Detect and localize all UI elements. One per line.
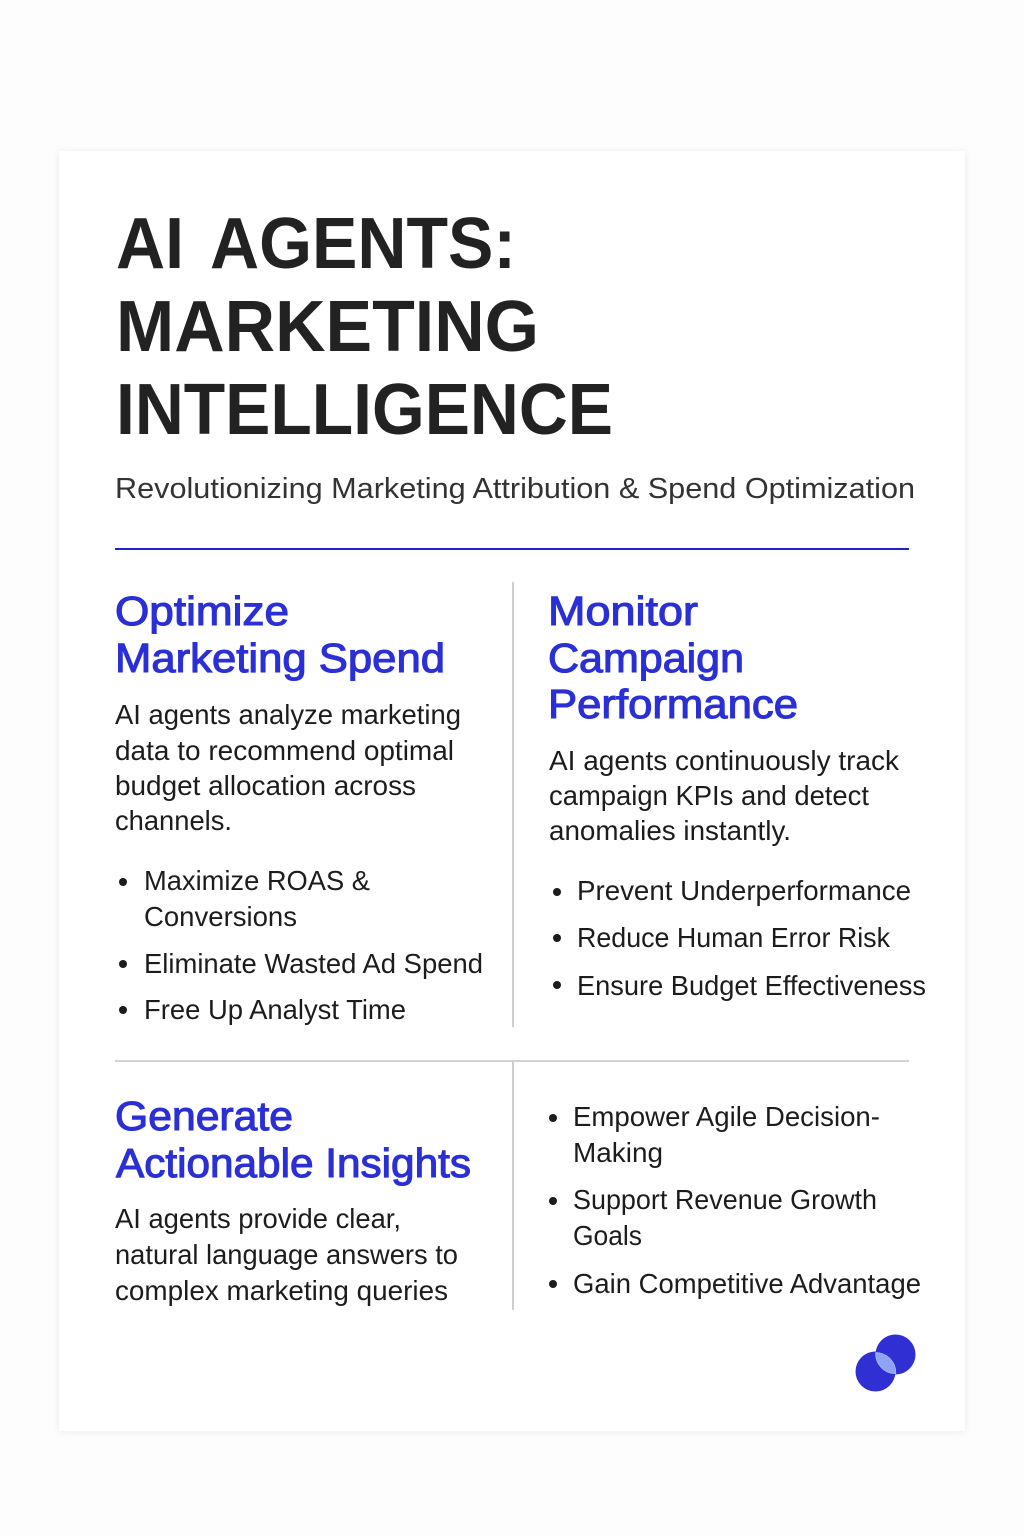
text: monitor description: AI agents continuously track (549, 745, 900, 776)
heading: monitor campaign performance: Campaign (548, 635, 744, 681)
bullet list: monitor benefits: Prevent Underperformance (577, 875, 911, 906)
text: generate description: AI agents provide clear, (115, 1203, 401, 1234)
heading: monitor campaign performance (548, 588, 798, 727)
subtitle: Revolutionizing Marketing Attribution & Spend Optimization (115, 473, 915, 505)
title (116, 204, 613, 450)
panel: generate actionable insights (115, 1093, 471, 1306)
bullet list: insights benefits (549, 1101, 921, 1299)
heading: generate actionable insights: Generate (115, 1093, 293, 1139)
heading: optimize marketing spend: Optimize (115, 588, 289, 634)
heading: optimize marketing spend (115, 588, 445, 681)
panel: optimize marketing spend (115, 588, 483, 1025)
bullet list: insights benefits: Support Revenue Growth (573, 1184, 877, 1215)
panel: monitor campaign performance (548, 588, 926, 1001)
text: optimize description: budget allocation across (115, 770, 416, 801)
text: optimize description (115, 699, 461, 836)
bullet list: optimize benefits: Maximize ROAS & (144, 865, 370, 896)
heading: optimize marketing spend: Marketing Spend (115, 635, 445, 681)
text: optimize description: data to recommend optimal (115, 735, 454, 766)
text: monitor description: campaign KPIs and detect (549, 780, 869, 811)
text: generate description (115, 1203, 458, 1306)
background card (59, 151, 965, 1431)
bullet list: insights benefits: Making (573, 1137, 663, 1168)
bullet list: optimize benefits: Conversions (144, 901, 297, 932)
bullet list: optimize benefits: Free Up Analyst Time (144, 994, 406, 1025)
bullet list: optimize benefits: Eliminate Wasted Ad Spend (144, 948, 483, 979)
title: AI (116, 204, 184, 284)
title: MARKETING (116, 287, 539, 367)
heading: generate actionable insights: Actionable Insights (116, 1140, 471, 1186)
text: monitor description: anomalies instantly. (549, 815, 791, 846)
bullet list: optimize benefits (119, 865, 483, 1025)
bullet list: monitor benefits: Ensure Budget Effectiveness (577, 970, 926, 1001)
bullet list: monitor benefits: Reduce Human Error Risk (577, 922, 891, 953)
bullet list: insights benefits: Gain Competitive Advantage (573, 1268, 921, 1299)
heading: monitor campaign performance: Performance (548, 681, 798, 727)
title: AGENTS: (210, 204, 516, 284)
bullet list: insights benefits: Goals (573, 1220, 642, 1251)
icon: overlapping circles logo (856, 1334, 916, 1392)
text: optimize description: AI agents analyze marketing (115, 699, 461, 730)
text: optimize description: channels. (115, 805, 232, 836)
heading: monitor campaign performance: Monitor (548, 588, 698, 634)
text: generate description: natural language answers to (115, 1239, 458, 1270)
bullet list: monitor benefits (553, 875, 926, 1001)
bullet list: insights benefits: Empower Agile Decision- (573, 1101, 880, 1132)
heading: generate actionable insights (115, 1093, 471, 1186)
title: INTELLIGENCE (116, 370, 613, 450)
text: generate description: complex marketing queries (115, 1275, 448, 1306)
text: monitor description (549, 745, 900, 846)
